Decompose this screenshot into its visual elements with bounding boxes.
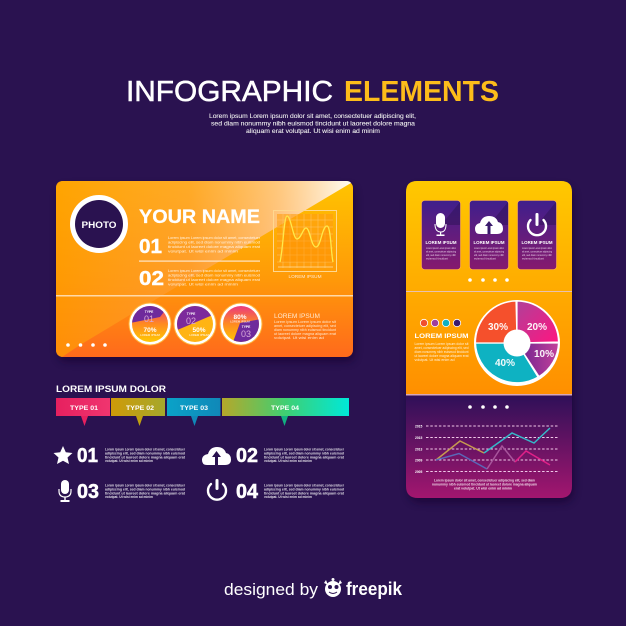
mini card: microphone: sit amet, consectetuer adipiscing xyxy=(426,250,456,254)
donut: type 01 70% xyxy=(128,302,172,346)
list item 02: volutpat. Ut wisi enim ad minim xyxy=(264,459,312,463)
donut: type 01 70%: TYPE xyxy=(145,310,154,314)
legend text: Lorem ipsum Lorem ipsum dolor sit xyxy=(414,342,469,346)
mini card: power xyxy=(518,200,556,270)
segment type 01: TYPE 01 xyxy=(70,405,98,412)
donut: type 03 80%: LOREM IPSUM xyxy=(230,320,250,324)
gloss highlight xyxy=(56,181,351,357)
list item 04: adipiscing elit, sed diam nonummy nibh euismod xyxy=(264,488,344,492)
list item 02: Lorem ipsum Lorem ipsum dolor sit amet, consectetuer xyxy=(264,448,345,452)
item 01: volutpat. Ut wisi enim ad minim xyxy=(168,250,238,254)
donut: type 02 50% xyxy=(174,302,216,346)
list item 01: adipiscing elit, sed diam nonummy nibh euismod xyxy=(105,452,185,456)
list item 01: 01 xyxy=(77,445,98,467)
mini card: power: sit amet, consectetuer adipiscing xyxy=(522,250,552,254)
legend text: diam nonummy nibh euismod tincidunt xyxy=(414,350,469,354)
subtitle text: Lorem ipsum Lorem ipsum dolor sit amet, consectetuer adipiscing elit, xyxy=(209,113,416,120)
footer attribution: freepik xyxy=(346,579,403,599)
icon: freepik mascot xyxy=(324,578,342,597)
donut: type 03 80% xyxy=(220,302,262,346)
item 02: tincidunt ut laoreet dolore magna aliquam erat xyxy=(168,278,261,282)
donut: type 02 50%: LOREM IPSUM xyxy=(189,333,209,337)
icon: power xyxy=(208,479,226,500)
pie chart xyxy=(474,300,560,386)
mini card: power: elit, sed diam nonummy nibh xyxy=(522,253,552,257)
side text: volutpat. Ut wisi enim ad xyxy=(274,336,324,340)
pie chart: 10% xyxy=(534,349,554,360)
item 01 xyxy=(139,236,261,258)
mini card: microphone: LOREM IPSUM xyxy=(426,240,457,245)
bottom section xyxy=(406,395,572,498)
mini card: cloud upload: sit amet, consectetuer adipiscing xyxy=(474,250,504,254)
area chart: LOREM IPSUM xyxy=(288,274,322,280)
donut: type 02 50%: TYPE xyxy=(187,312,196,316)
divider xyxy=(56,295,353,296)
subtitle text: aliquam erat volutpat. Ut wisi enim ad minim xyxy=(246,128,381,135)
mini card: cloud upload: LOREM IPSUM xyxy=(474,240,505,245)
line chart xyxy=(415,424,558,474)
panel: type bar xyxy=(56,384,349,426)
side text xyxy=(274,314,336,340)
line chart: 2009 xyxy=(415,458,423,462)
area chart xyxy=(274,210,336,280)
pie chart: 40% xyxy=(495,358,515,369)
segment type 04: TYPE 04 xyxy=(271,405,299,412)
list item 04 xyxy=(208,479,345,503)
icon: microphone xyxy=(59,480,71,502)
photo circle xyxy=(70,195,128,253)
list item 04: volutpat. Ut wisi enim ad minim xyxy=(264,495,312,499)
donut: type 01 70%: 70% xyxy=(143,327,157,334)
legend text: LOREM IPSUM xyxy=(414,333,469,340)
line chart: 2013 xyxy=(415,448,423,452)
mini card: power: Lorem ipsum Lorem ipsum dolor xyxy=(522,246,552,250)
donut: type 03 80%: 80% xyxy=(233,314,247,321)
item 01: adipiscing elit, sed diam nonummy nibh euismod xyxy=(168,240,260,244)
photo circle: PHOTO xyxy=(82,220,116,231)
chart caption xyxy=(432,478,537,490)
list item 01 xyxy=(54,445,186,467)
list item 02: tincidunt ut laoreet dolore magna aliquam erat xyxy=(264,456,345,460)
donut: type 02 50%: 50% xyxy=(192,327,206,334)
list item 04: tincidunt ut laoreet dolore magna aliquam erat xyxy=(264,492,345,496)
segment type 04 xyxy=(222,398,349,426)
mini card: cloud upload: elit, sed diam nonummy nibh xyxy=(474,253,504,257)
segment type 03 xyxy=(167,398,220,426)
side text: amet, consectetuer adipiscing elit, sed xyxy=(274,324,336,328)
mini card: cloud upload: euismod tincidunt xyxy=(474,256,496,260)
legend text: volutpat. Ut wisi enim ad xyxy=(414,358,455,362)
item 02: Lorem ipsum Lorem ipsum dolor sit amet, consectetuer xyxy=(168,269,261,273)
chart caption: nonummy nibh euismod tincidunt ut laoreet dolore magna aliquam xyxy=(432,482,537,486)
pie chart: 20% xyxy=(527,322,547,333)
list item 03: adipiscing elit, sed diam nonummy nibh euismod xyxy=(105,488,185,492)
donut: type 03 80%: TYPE xyxy=(242,325,251,329)
legend text: ut laoreet dolore magna aliquam erat xyxy=(414,354,469,358)
icon: star xyxy=(54,446,72,464)
legend text: amet, consectetuer adipiscing elit, sed xyxy=(414,346,469,350)
subtitle text xyxy=(209,113,416,135)
pager dots xyxy=(66,343,107,347)
footer attribution: designed by xyxy=(224,580,319,599)
item 01: tincidunt ut laoreet dolore magna aliquam erat xyxy=(168,245,261,249)
panel: profile card xyxy=(56,181,355,362)
legend text xyxy=(414,333,469,362)
side text: ut laoreet dolore magna aliquam erat xyxy=(274,332,336,336)
list item 01: Lorem ipsum Lorem ipsum dolor sit amet, consectetuer xyxy=(105,448,186,452)
list item 03 xyxy=(59,480,186,503)
pager dots top xyxy=(468,278,509,282)
item 02 xyxy=(139,268,261,290)
top section xyxy=(406,181,572,395)
segment type 02 xyxy=(111,398,165,426)
icon: cloud upload xyxy=(202,447,231,465)
list item 03: 03 xyxy=(77,481,99,503)
side text: diam nonummy nibh euismod tincidunt xyxy=(274,328,336,332)
list item 02 xyxy=(202,445,345,467)
side text: LOREM IPSUM xyxy=(274,314,320,320)
donut: type 02 50%: 02 xyxy=(186,316,196,326)
item 02: 02 xyxy=(139,268,164,290)
legend dots xyxy=(420,319,461,327)
mini card: power: euismod tincidunt xyxy=(522,256,544,260)
name heading: YOUR NAME xyxy=(139,207,260,228)
chart caption: erat volutpat. Ut wisi enim ad minim xyxy=(454,486,512,490)
list item 02: adipiscing elit, sed diam nonummy nibh euismod xyxy=(264,452,344,456)
mini card: microphone: Lorem ipsum Lorem ipsum dolor xyxy=(426,246,456,250)
line chart: 2015 xyxy=(415,436,423,440)
title: INFOGRAPHIC xyxy=(126,76,333,108)
item 02: adipiscing elit, sed diam nonummy nibh euismod xyxy=(168,274,260,278)
pie chart: 30% xyxy=(488,322,508,333)
item 01: Lorem ipsum Lorem ipsum dolor sit amet, consectetuer xyxy=(168,236,261,240)
mini card: microphone xyxy=(422,200,460,270)
donut: type 01 70%: LOREM IPSUM xyxy=(140,333,160,337)
line chart: 2005 xyxy=(415,470,423,474)
mini card: cloud upload xyxy=(470,200,508,270)
mini card: microphone: elit, sed diam nonummy nibh xyxy=(426,253,456,257)
item 01: 01 xyxy=(139,236,162,258)
segment type 02: TYPE 02 xyxy=(126,405,154,412)
line chart: 2015 xyxy=(415,424,423,428)
list item 03: Lorem ipsum Lorem ipsum dolor sit amet, consectetuer xyxy=(105,484,186,488)
list item 01: volutpat. Ut wisi enim ad minim xyxy=(105,459,153,463)
list item 04: Lorem ipsum Lorem ipsum dolor sit amet, consectetuer xyxy=(264,484,345,488)
pager dots bottom xyxy=(468,405,509,409)
segment type 03: TYPE 03 xyxy=(180,405,208,412)
title: ELEMENTS xyxy=(344,76,499,108)
chart caption: Lorem ipsum dolor sit amet, consectetuer adipiscing elit, sed diam xyxy=(434,478,535,482)
heading: LOREM IPSUM DOLOR xyxy=(56,384,166,395)
list item 04: 04 xyxy=(236,481,259,503)
item 02: volutpat. Ut wisi enim ad minim xyxy=(168,282,238,286)
segment type 01 xyxy=(56,398,110,426)
mini card: power: LOREM IPSUM xyxy=(522,240,553,245)
donut: type 03 80%: 03 xyxy=(241,329,251,339)
side text: Lorem ipsum Lorem ipsum dolor sit xyxy=(274,320,336,324)
mini card: cloud upload: Lorem ipsum Lorem ipsum dolor xyxy=(474,246,504,250)
panel: dashboard card xyxy=(406,181,574,503)
list item 03: tincidunt ut laoreet dolore magna aliquam erat xyxy=(105,492,186,496)
subtitle text: sed diam nonummy nibh euismod tincidunt ut laoreet dolore magna xyxy=(211,120,415,128)
list item 01: tincidunt ut laoreet dolore magna aliquam erat xyxy=(105,456,186,460)
donut: type 01 70%: 01 xyxy=(144,314,154,324)
mini card: microphone: euismod tincidunt xyxy=(426,256,448,260)
title xyxy=(126,76,499,108)
list item 02: 02 xyxy=(236,445,258,467)
footer attribution xyxy=(224,578,403,599)
list item 03: volutpat. Ut wisi enim ad minim xyxy=(105,495,153,499)
